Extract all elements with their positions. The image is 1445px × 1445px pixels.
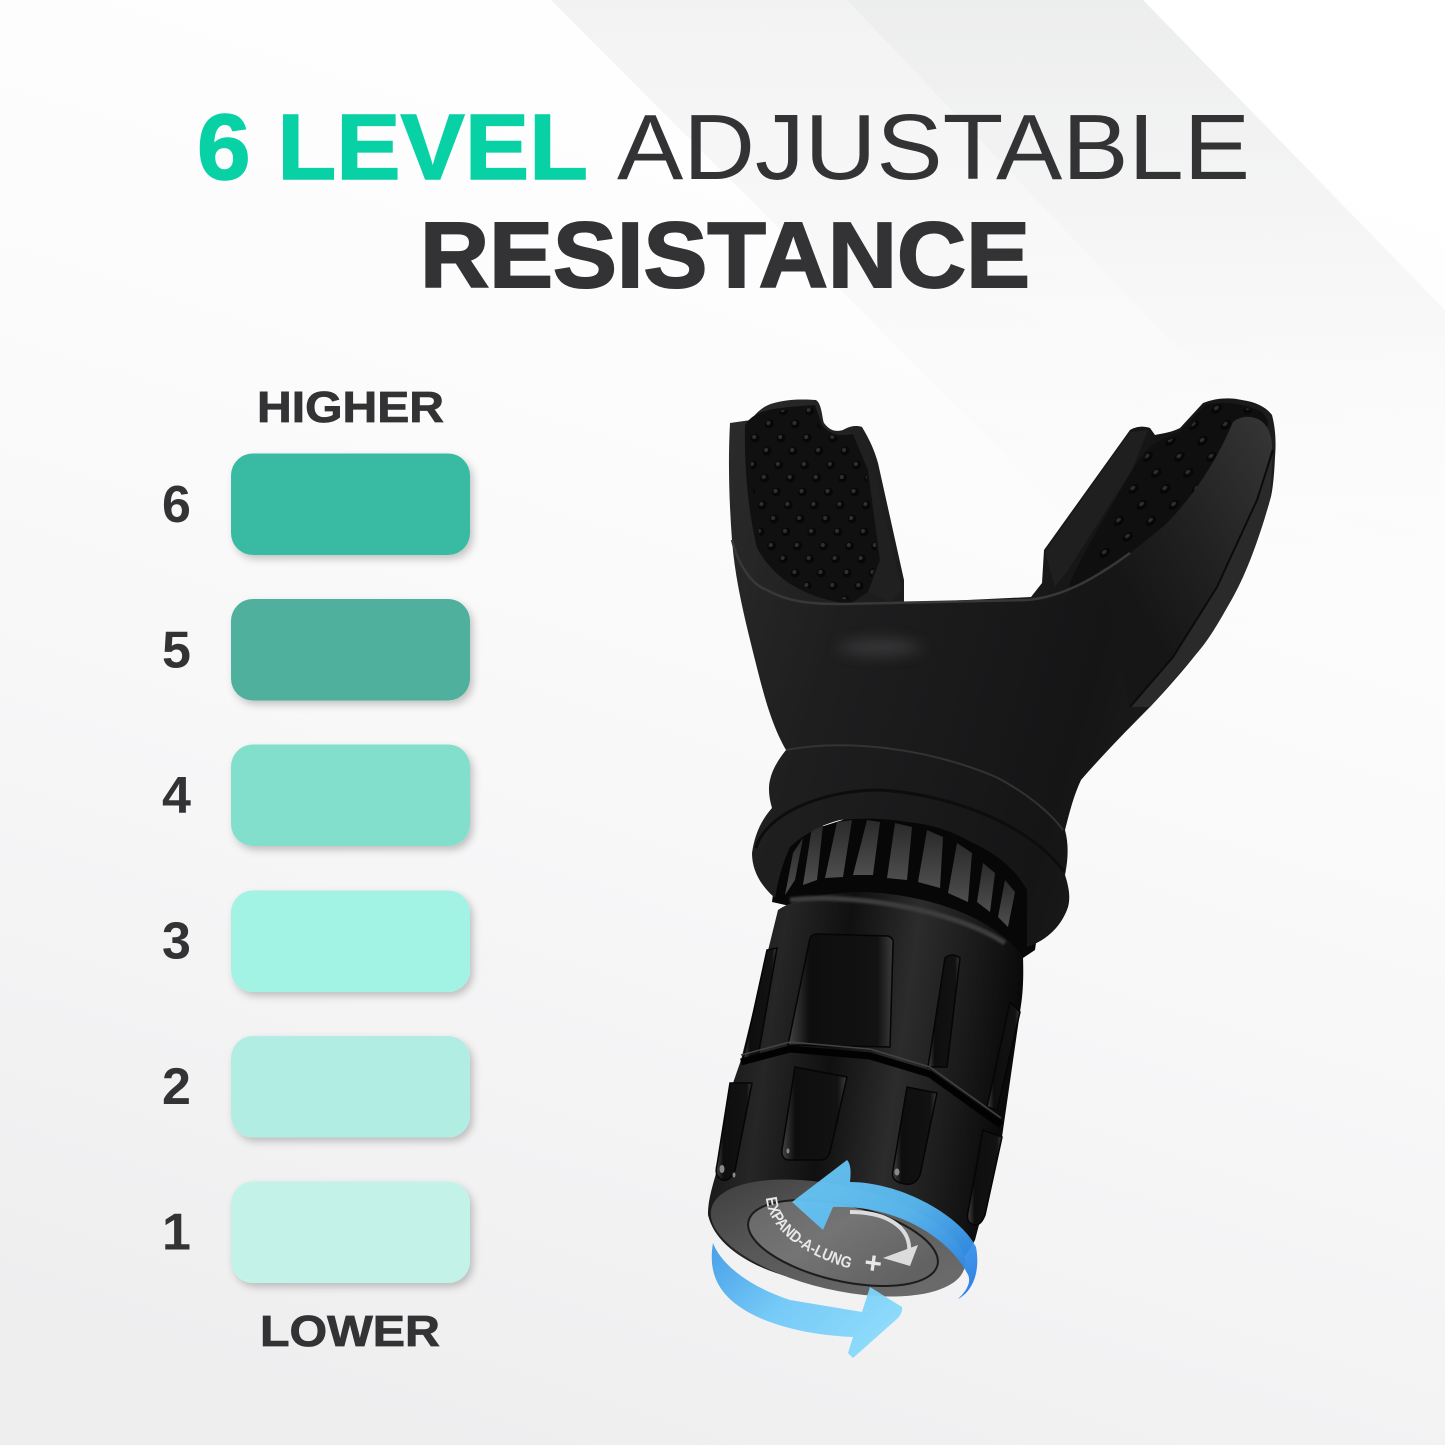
outer wing xyxy=(1130,450,1273,707)
front lip lobe xyxy=(1100,417,1272,707)
level 4: 4 xyxy=(162,767,191,825)
brand label: EXPAND-A-LUNG xyxy=(766,1196,852,1268)
brand label xyxy=(766,1196,884,1281)
teeth grip left xyxy=(750,408,878,600)
body highlight xyxy=(835,639,925,656)
cap body xyxy=(708,892,1023,1290)
level 3 xyxy=(162,890,470,992)
rotation arrow top xyxy=(792,1160,977,1299)
left flange highlight xyxy=(852,431,902,602)
level 2 xyxy=(162,1036,470,1138)
rotation arrow bottom xyxy=(712,1243,902,1358)
level 2: 2 xyxy=(162,1058,191,1116)
level 5: 5 xyxy=(162,622,191,680)
level 6: 6 xyxy=(162,476,191,534)
teeth grip right xyxy=(1090,404,1256,578)
collar band xyxy=(786,745,1063,830)
neck ribs xyxy=(772,808,1045,958)
direction arrow on disc xyxy=(850,1212,918,1266)
end cap rim xyxy=(700,1158,976,1318)
adjustment cap xyxy=(708,892,1024,1296)
title line 1: ADJUSTABLE xyxy=(617,95,1250,199)
brand label: + xyxy=(862,1246,884,1281)
top gloss xyxy=(790,898,1005,943)
cap ridges xyxy=(716,934,1020,1225)
title line 1 xyxy=(197,95,1250,199)
ridge specular dots xyxy=(720,1148,900,1178)
label: higher: HIGHER xyxy=(257,383,444,432)
level 3: 3 xyxy=(162,912,191,970)
label: lower: LOWER xyxy=(260,1307,440,1356)
level 1 xyxy=(162,1182,470,1283)
rubber body xyxy=(729,398,1276,947)
resistance scale xyxy=(162,383,470,1356)
mouthpiece xyxy=(729,398,1276,947)
level 6 xyxy=(162,454,470,555)
collar ring xyxy=(756,790,1064,872)
product: breathing trainer xyxy=(708,398,1276,1358)
end cap disc xyxy=(740,1184,946,1302)
title line 1: 6 LEVEL xyxy=(197,95,588,199)
inner channel left xyxy=(745,405,880,604)
outer wing edge xyxy=(1130,450,1273,707)
level 5 xyxy=(162,599,470,700)
title xyxy=(197,95,1250,307)
inner channel right xyxy=(1070,403,1268,590)
groove xyxy=(741,1049,1001,1125)
right flange highlight xyxy=(1045,430,1148,587)
level 1: 1 xyxy=(162,1204,191,1262)
title line 2: RESISTANCE xyxy=(420,203,1030,307)
lip edge xyxy=(732,540,1130,604)
level 4 xyxy=(162,744,470,846)
